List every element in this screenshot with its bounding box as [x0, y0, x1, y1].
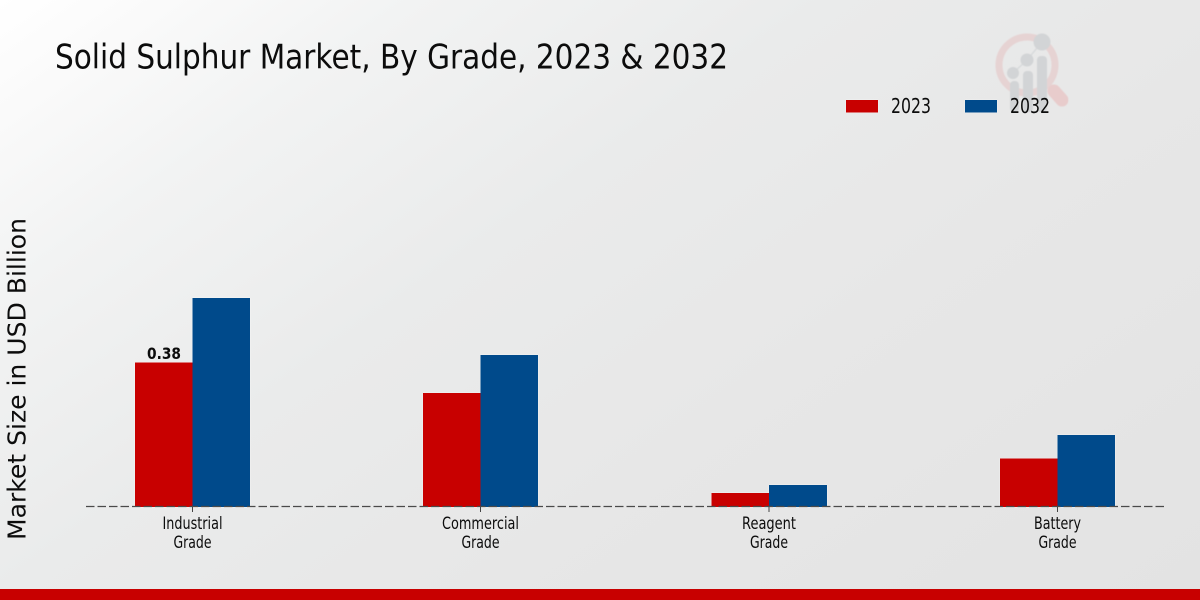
- bar chart: [86, 298, 1164, 512]
- x axis baseline: [86, 506, 1164, 508]
- icon: watermark logo: [999, 34, 1062, 112]
- x label: Battery Grade: Battery: [1034, 514, 1081, 533]
- x label: Industrial Grade: [162, 514, 222, 552]
- x label: Commercial Grade: [442, 514, 519, 552]
- x label: Battery Grade: Grade: [1038, 533, 1076, 552]
- x label: Industrial Grade: Industrial: [162, 514, 222, 533]
- legend item: 2023: [846, 94, 931, 118]
- group: Commercial Grade: [423, 355, 538, 507]
- legend item: 2032: 2032: [1010, 94, 1050, 118]
- x label: Reagent Grade: Grade: [750, 533, 788, 552]
- legend item: 2023: 2023: [891, 94, 931, 118]
- group: Reagent Grade: [712, 485, 827, 507]
- legend item: 2032: [965, 94, 1050, 118]
- x label: Commercial Grade: Commercial: [442, 514, 519, 533]
- group: Industrial Grade: [135, 298, 250, 507]
- x label: Battery Grade: [1034, 514, 1081, 552]
- legend: [846, 94, 1050, 118]
- value label: 0.38: [147, 344, 181, 363]
- footer bar: [0, 589, 1200, 600]
- x label: Reagent Grade: [742, 514, 796, 552]
- x label: Industrial Grade: Grade: [174, 533, 212, 552]
- x label: Reagent Grade: Reagent: [742, 514, 796, 533]
- group: Battery Grade: [1000, 435, 1115, 507]
- x label: Commercial Grade: Grade: [462, 533, 500, 552]
- y axis label: Market Size in USD Billion: [2, 218, 32, 540]
- title: Solid Sulphur Market, By Grade, 2023 & 2032: [55, 38, 728, 78]
